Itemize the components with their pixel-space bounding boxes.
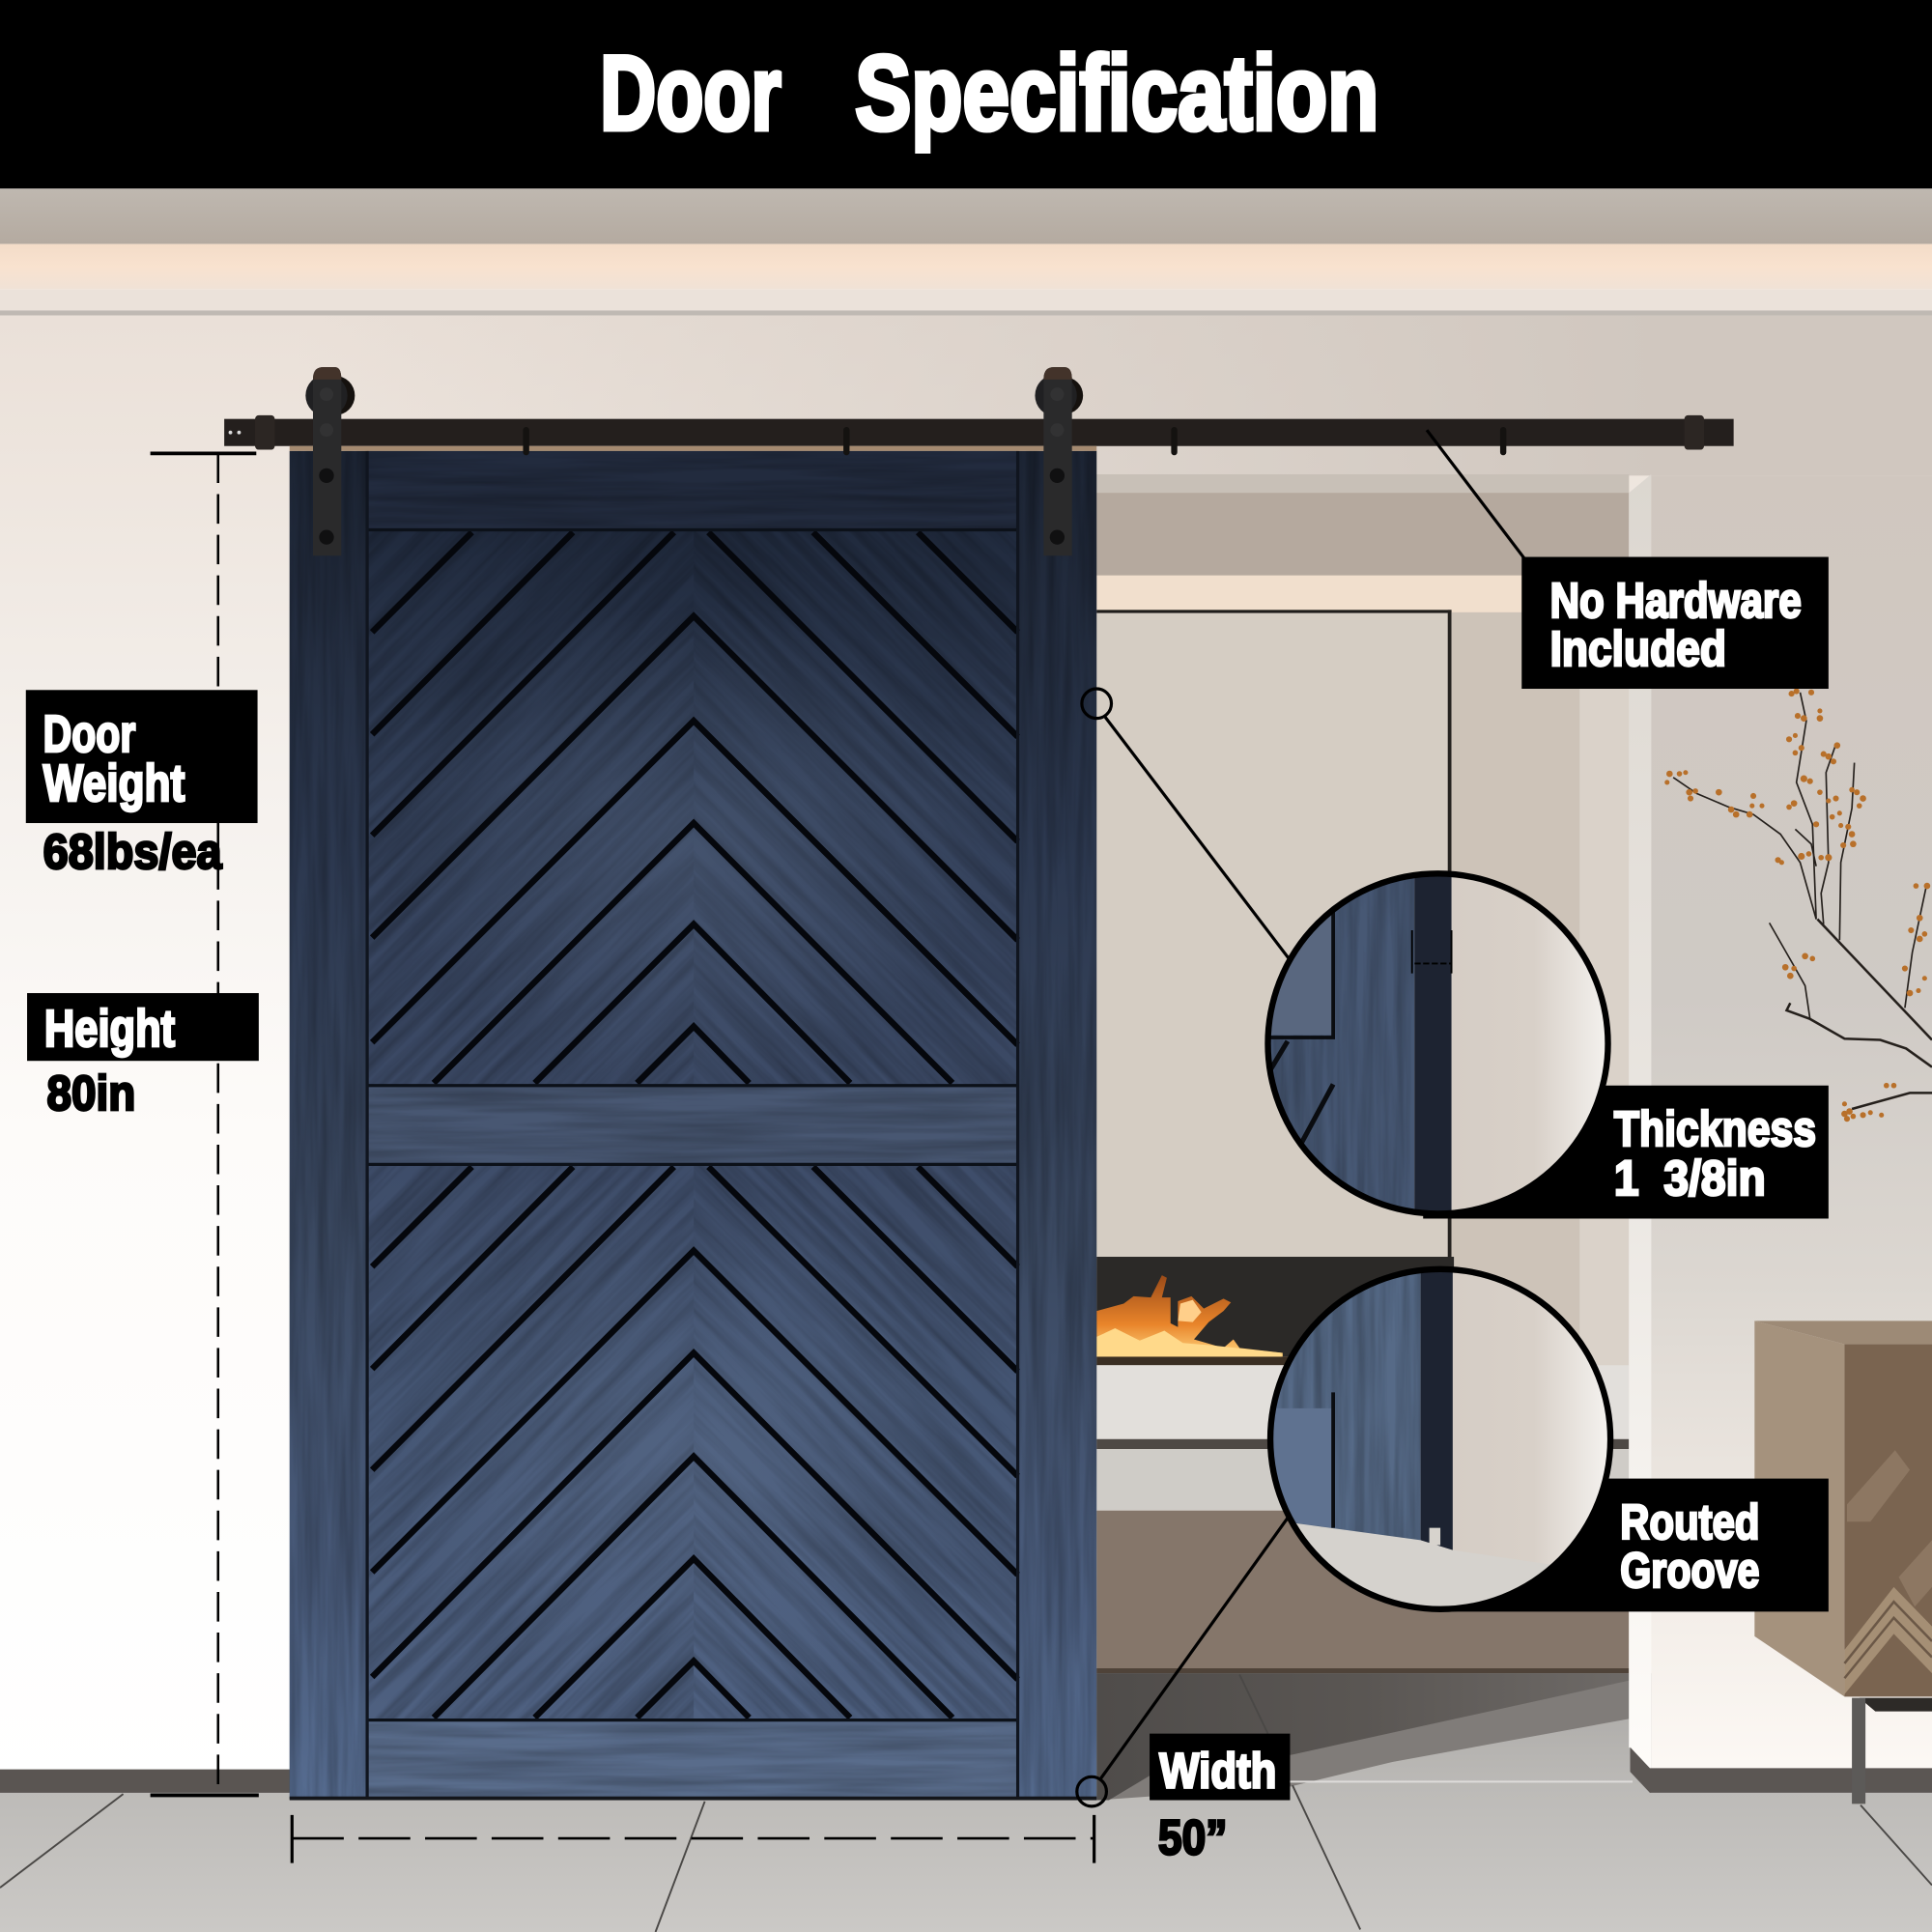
cabinet	[1754, 1321, 1932, 1804]
floor	[0, 1673, 1932, 1932]
door lower herringbone panel	[369, 1166, 1016, 1719]
height dimension line	[151, 453, 259, 1795]
routed groove detail lens	[1267, 1265, 1613, 1612]
callout: height	[27, 993, 259, 1121]
callout: no hardware included	[1427, 430, 1829, 689]
callout: routed groove: Groove	[1620, 1543, 1759, 1598]
door upper herringbone panel	[369, 531, 1016, 1084]
door rails	[367, 451, 1018, 1799]
callout: no hardware included: Included	[1550, 621, 1726, 676]
width dimension line	[292, 1815, 1094, 1863]
sliding track hardware	[224, 367, 1734, 555]
decorative branch with berries	[1664, 688, 1932, 1122]
callout: height: 80in	[46, 1065, 135, 1121]
door chevron grooves	[372, 532, 1018, 1718]
fireplace flames	[1096, 1275, 1283, 1356]
callout: height: Height	[44, 1001, 175, 1058]
callout: door weight: Door	[43, 706, 135, 763]
door jamb and baseboard	[1629, 474, 1932, 1793]
title: Specification	[855, 35, 1378, 153]
title: Door	[600, 35, 781, 153]
callout: thickness	[1082, 689, 1829, 1233]
callout: routed groove	[1077, 1257, 1829, 1806]
thickness detail lens	[1264, 870, 1611, 1216]
callout: routed groove: Routed	[1620, 1494, 1759, 1549]
callout: door weight	[26, 690, 258, 879]
callout: door weight: Weight	[43, 755, 185, 812]
hanger left	[305, 367, 355, 555]
callout: thickness: Thickness	[1614, 1101, 1816, 1156]
callout: no hardware included: No Hardware	[1550, 573, 1802, 628]
barn door	[290, 450, 1097, 1801]
callout: width: Width	[1159, 1744, 1276, 1799]
callout: thickness: 1 3/8in	[1614, 1151, 1766, 1206]
header bar	[0, 0, 1932, 188]
door stile grain	[290, 451, 1096, 1801]
callout: width: 50”	[1158, 1810, 1227, 1865]
callout: door weight: 68lbs/ea	[43, 824, 222, 879]
doorway interior	[1096, 474, 1629, 1674]
hanger right	[1035, 367, 1083, 555]
callout: width	[1150, 1734, 1290, 1865]
